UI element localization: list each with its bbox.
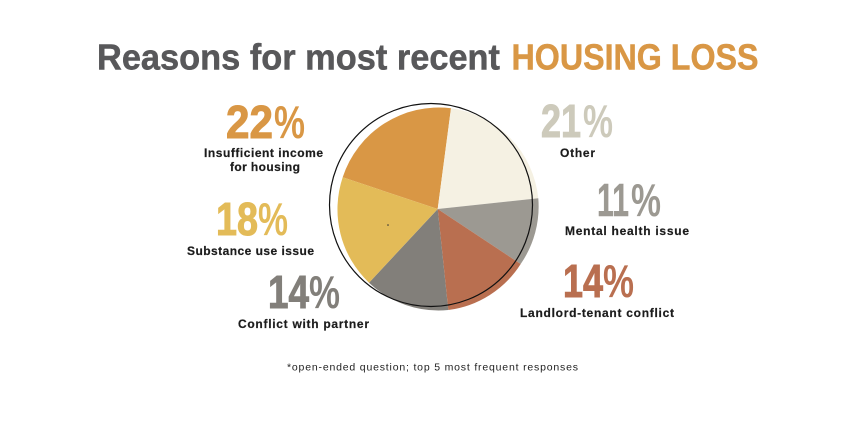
stat: 21% other: Other xyxy=(560,146,595,160)
slice: substance use issue 18% xyxy=(337,177,438,283)
stat: 11% mental health: 11 xyxy=(597,174,629,226)
stat: 11% mental health: % xyxy=(631,174,661,226)
stat: 14% landlord-tenant: Landlord-tenant conflict xyxy=(520,306,674,320)
stat: 14% conflict with partner xyxy=(238,266,369,331)
footnote: *open-ended question; top 5 most frequent responses xyxy=(287,362,578,374)
stat: 21% other: % xyxy=(583,95,613,147)
stat: 21% other: 21 xyxy=(541,95,581,147)
pie chart xyxy=(330,104,539,310)
stat: 14% landlord-tenant xyxy=(520,255,674,320)
slice: insufficient income 22% xyxy=(343,108,451,209)
slice: landlord-tenant conflict 14% xyxy=(438,209,521,310)
title xyxy=(97,36,758,78)
stat: 18% substance use xyxy=(187,193,314,258)
stat: 22% insufficient income: 22 xyxy=(226,96,273,148)
slice: mental health issue 11% xyxy=(438,198,539,264)
title: HOUSING LOSS xyxy=(512,36,758,78)
slice: other 21% xyxy=(438,108,538,209)
stat: 14% conflict with partner: % xyxy=(309,266,340,318)
stat: 14% landlord-tenant: % xyxy=(603,255,634,307)
title: Reasons for most recent xyxy=(97,36,500,78)
stat: 21% other xyxy=(541,95,613,160)
stat: 14% landlord-tenant: 14 xyxy=(563,255,603,307)
stat: 18% substance use: 18 xyxy=(216,193,258,245)
stat: 22% insufficient income xyxy=(204,96,323,174)
pie outline ring xyxy=(330,104,532,306)
stat: 11% mental health: Mental health issue xyxy=(565,224,689,238)
stat: 14% conflict with partner: Conflict with partner xyxy=(238,317,369,331)
centre dot xyxy=(387,224,389,226)
stat: 18% substance use: Substance use issue xyxy=(187,244,314,258)
slice: conflict with partner 14% xyxy=(369,209,448,310)
stat: 22% insufficient income: Insufficient income xyxy=(204,146,323,160)
stat: 11% mental health xyxy=(565,174,689,238)
stat: 22% insufficient income: % xyxy=(274,96,305,148)
stat: 18% substance use: % xyxy=(258,193,288,245)
stat: 22% insufficient income: for housing xyxy=(230,160,300,174)
stat: 14% conflict with partner: 14 xyxy=(268,266,309,318)
